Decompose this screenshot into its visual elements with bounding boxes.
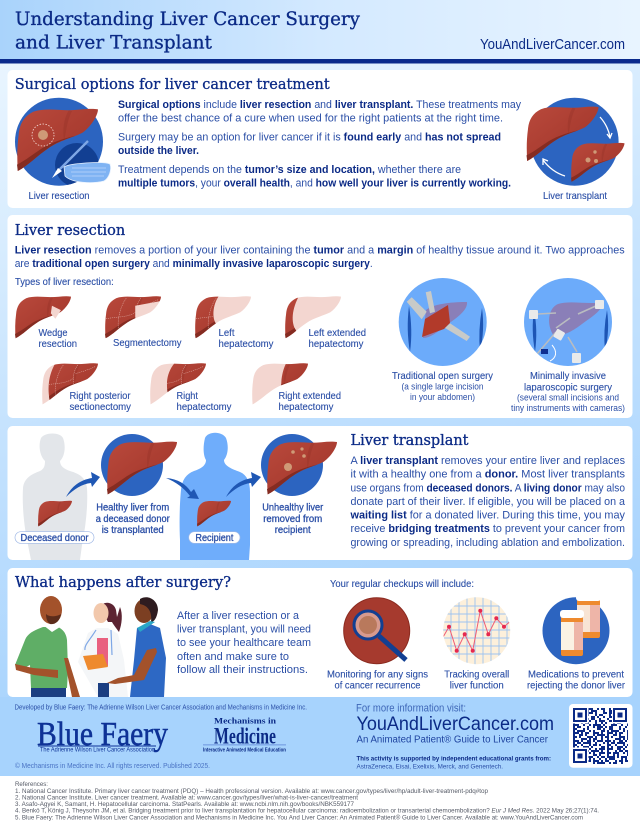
website call to action: YouAndLiverCancer.com <box>356 714 554 735</box>
arrow: recipient to unhealthy liver <box>226 472 261 497</box>
website call to action: An Animated Patient® Guide to Liver Cancer <box>356 734 549 746</box>
label: traditional open surgery: Traditional open surgery <box>392 371 494 382</box>
text block: transplant description <box>350 455 626 549</box>
website call to action: For more information visit: <box>356 702 466 714</box>
label: laparoscopic surgery: tiny instruments with cameras) <box>511 403 625 413</box>
text block: after surgery: After a liver resection or a <box>177 610 300 622</box>
text block: after surgery: to see your healthcare team <box>177 637 311 649</box>
liver type: left hepatectomy: hepatectomy <box>218 339 274 350</box>
label: laparoscopic surgery: laparoscopic surgery <box>524 382 613 394</box>
liver type: right hepatectomy: Right <box>176 391 198 402</box>
label: liver function <box>444 670 509 692</box>
website: YouAndLiverCancer.com <box>480 36 625 53</box>
text block: after surgery: often and make sure to <box>177 651 289 663</box>
liver type: right extended hepatectomy: Right extended <box>278 391 341 402</box>
references: 4. Benkö T, König J, Theysohn JM, et al. Bridging treatment prior to liver transplantation for hepatocellular carcinoma: radioembolization or transarterial chemoembolization? Eur J Med Res. 2022 May 26;27(1):74. <box>15 808 599 815</box>
heading: Liver resection <box>15 221 125 239</box>
icon: unhealthy liver <box>261 434 337 496</box>
liver type: segmentectomy <box>105 296 182 349</box>
text block: transplant description: waiting list for a donated liver. During this time, you may <box>350 510 625 522</box>
text block: transplant description: A liver transplant removes your entire liver and replaces <box>350 455 625 467</box>
references <box>0 776 640 828</box>
label: traditional open surgery <box>392 371 494 402</box>
text block: resection description <box>15 244 625 270</box>
logo: Mechanisms in Medicine: Medicine <box>214 724 276 748</box>
icon: donor liver small <box>38 501 72 526</box>
label: monitoring: of cancer recurrence <box>334 680 421 692</box>
text block: transplant description: growing or spreading, including ablation and embolization. <box>350 537 625 549</box>
label: healthy liver: is transplanted <box>102 525 164 536</box>
liver type: left extended hepatectomy <box>285 296 366 350</box>
label: healthy liver: Healthy liver from <box>96 502 169 514</box>
text block: surgical options: multiple tumors, your overall health, and how well your liver is currently working. <box>118 178 511 190</box>
label: unhealthy liver: removed from <box>263 514 322 525</box>
label: monitoring: Monitoring for any signs <box>327 670 428 680</box>
text block: surgical options <box>118 99 521 190</box>
icon: medications <box>542 593 610 664</box>
label: monitoring <box>327 670 428 692</box>
text block: transplant description: use organs from deceased donors. A living donor may also <box>350 482 625 494</box>
pill: deceased donor: Deceased donor <box>20 533 89 544</box>
liver type: left extended hepatectomy: Left extended <box>308 328 366 339</box>
label: healthy liver <box>96 502 170 536</box>
label: unhealthy liver: recipient <box>275 525 311 536</box>
liver type: right posterior sectionectomy <box>42 363 132 413</box>
label: traditional open surgery: (a single large incision <box>402 382 484 392</box>
text block: resection description: are traditional open surgery and minimally invasive laparoscopic surgery. <box>15 258 373 270</box>
grants support: AstraZeneca, Eisai, Exelixis, Merck, and Genentech. <box>356 764 503 770</box>
liver type: right hepatectomy: hepatectomy <box>176 402 232 413</box>
icon: minimally invasive laparoscopic surgery <box>524 278 612 366</box>
copyright: © Mechanisms in Medicine Inc. All rights reserved. Published 2025. <box>15 761 210 770</box>
text block: transplant description: donate part of their liver. If eligible, you will be placed on a <box>350 496 626 508</box>
label: medications: rejecting the donor liver <box>527 680 626 692</box>
heading: What happens after surgery? <box>15 573 231 591</box>
liver type: right extended hepatectomy <box>252 363 341 413</box>
label: liver function: Tracking overall <box>444 670 509 680</box>
pill: recipient: Recipient <box>195 533 234 544</box>
icon: healthy donor liver <box>101 434 177 496</box>
footer band <box>0 697 640 776</box>
liver type: right extended hepatectomy: hepatectomy <box>278 402 334 413</box>
liver type: left hepatectomy <box>195 296 274 350</box>
title: Understanding Liver Cancer Surgery <box>15 8 360 30</box>
sub-heading: types of resection: Types of liver resection: <box>15 277 114 288</box>
text block: surgical options: outside the liver. <box>118 145 199 157</box>
panel: surgical options <box>8 70 632 208</box>
liver type: right posterior sectionectomy: sectionectomy <box>70 402 132 413</box>
label: medications <box>527 670 626 692</box>
liver type: wedge resection: resection <box>38 339 77 350</box>
references: 2. National Cancer Institute. Liver cancer treatment. Available at: www.cancer.gov/types/liver/what-is-liver-cancer/treatment <box>15 794 358 801</box>
QR code <box>569 704 632 768</box>
silhouette: deceased donor <box>23 434 87 560</box>
patient <box>15 596 80 697</box>
icon: liver resection <box>15 98 111 187</box>
icon: liver transplant <box>526 98 624 186</box>
references: 5. Blue Faery: The Adrienne Wilson Liver Cancer Association and Mechanisms in Medicine Inc. You And Liver Cancer: An Animated Patient® Guide to Liver Cancer. Available at: www.YouAndLiverCancer.com <box>15 813 583 821</box>
icon: monitoring <box>344 598 410 664</box>
header banner <box>0 0 640 64</box>
label: laparoscopic surgery: (several small incisions and <box>517 392 619 402</box>
references: 1. National Cancer Institute. Primary liver cancer treatment (PDQ) – Health professional version. Available at: www.cancer.gov/types/liver/hp/adult-liver-treatment-pdq#top <box>15 788 488 795</box>
panel: what happens after surgery <box>8 568 632 697</box>
text block: after surgery <box>177 610 311 676</box>
liver type: wedge resection <box>15 296 77 350</box>
liver type: segmentectomy: Segmentectomy <box>113 338 182 349</box>
text block: surgical options: Treatment depends on the tumor’s size and location, whether there are <box>118 164 461 176</box>
developer credit: Developed by Blue Faery: The Adrienne Wilson Liver Cancer Association and Mechanisms in Medicine Inc. <box>14 704 307 712</box>
arrow: healthy liver to recipient <box>166 478 199 499</box>
grants support <box>356 756 551 770</box>
logo: Mechanisms in Medicine: Mechanisms in <box>214 716 276 726</box>
title: and Liver Transplant <box>15 32 212 54</box>
references: References: <box>15 781 48 788</box>
icon: liver function chart <box>443 597 511 665</box>
label: unhealthy liver: Unhealthy liver <box>262 502 324 514</box>
heading: Surgical options for liver cancer treatment <box>15 75 330 93</box>
sub-heading: regular checkups: Your regular checkups will include: <box>330 579 474 590</box>
label: liver function: liver function <box>450 680 504 692</box>
label: laparoscopic surgery <box>511 371 625 413</box>
liver type: left hepatectomy: Left <box>218 328 235 339</box>
logo: Mechanisms in Medicine: Interactive Animated Medical Education <box>203 747 286 753</box>
icon: traditional open surgery <box>399 278 487 366</box>
text block: transplant description: receive bridging treatments to prevent your cancer from <box>350 523 625 535</box>
text block: transplant description: it with a healthy one from a donor. Most liver transplants <box>350 469 625 481</box>
text block: after surgery: liver transplant, you will need <box>177 624 311 636</box>
text block: resection description: Liver resection removes a portion of your liver containing the tumor and a margin of healthy tissue around it. Two approaches <box>15 244 625 256</box>
label: unhealthy liver <box>262 502 324 536</box>
text block: surgical options: Surgical options include liver resection and liver transplant. These treatments may <box>118 99 521 111</box>
label: healthy liver: a deceased donor <box>96 514 170 525</box>
nurse <box>107 597 166 697</box>
arrow: donor to healthy liver <box>66 472 100 497</box>
silhouette: recipient <box>180 433 250 560</box>
panel: liver resection <box>8 215 632 418</box>
liver type: wedge resection: Wedge <box>38 328 68 339</box>
page background <box>0 63 640 703</box>
panel: liver transplant <box>8 426 632 560</box>
label: liver resection: Liver resection <box>28 191 90 202</box>
logo: Mechanisms in Medicine <box>203 716 286 753</box>
label: liver transplant: Liver transplant <box>543 191 607 202</box>
logo: Blue Faery: The Adrienne Wilson Liver Cancer Association <box>40 748 155 754</box>
text block: surgical options: Surgery may be an option for liver cancer if it is found early and has not spread <box>118 132 501 144</box>
label: traditional open surgery: in your abdomen) <box>410 392 475 402</box>
title <box>15 8 360 54</box>
liver type: left extended hepatectomy: hepatectomy <box>308 339 364 350</box>
website call to action <box>356 702 554 746</box>
references: 3. Asafo-Agyei K, Samant, H. Hepatocellular carcinoma. StatPearls. Available at: www.ncbi.nlm.nih.gov/books/NBK559177 <box>15 801 354 808</box>
text block: after surgery: follow all their instructions. <box>177 664 308 676</box>
illustration: patient and healthcare team <box>15 596 166 697</box>
liver type: right hepatectomy <box>150 363 232 413</box>
icon: recipient liver small <box>197 501 231 526</box>
heading: Liver transplant <box>350 431 468 449</box>
text block: surgical options: offer the best chance of a cure when used for the right patients at the right time. <box>118 112 503 124</box>
doctor <box>78 603 128 697</box>
label: laparoscopic surgery: Minimally invasive <box>530 371 606 382</box>
grants support: This activity is supported by independent educational grants from: <box>356 756 551 762</box>
label: medications: Medications to prevent <box>528 670 624 680</box>
logo: Blue Faery: Blue Faery <box>37 716 168 753</box>
liver type: right posterior sectionectomy: Right posterior <box>70 391 131 402</box>
